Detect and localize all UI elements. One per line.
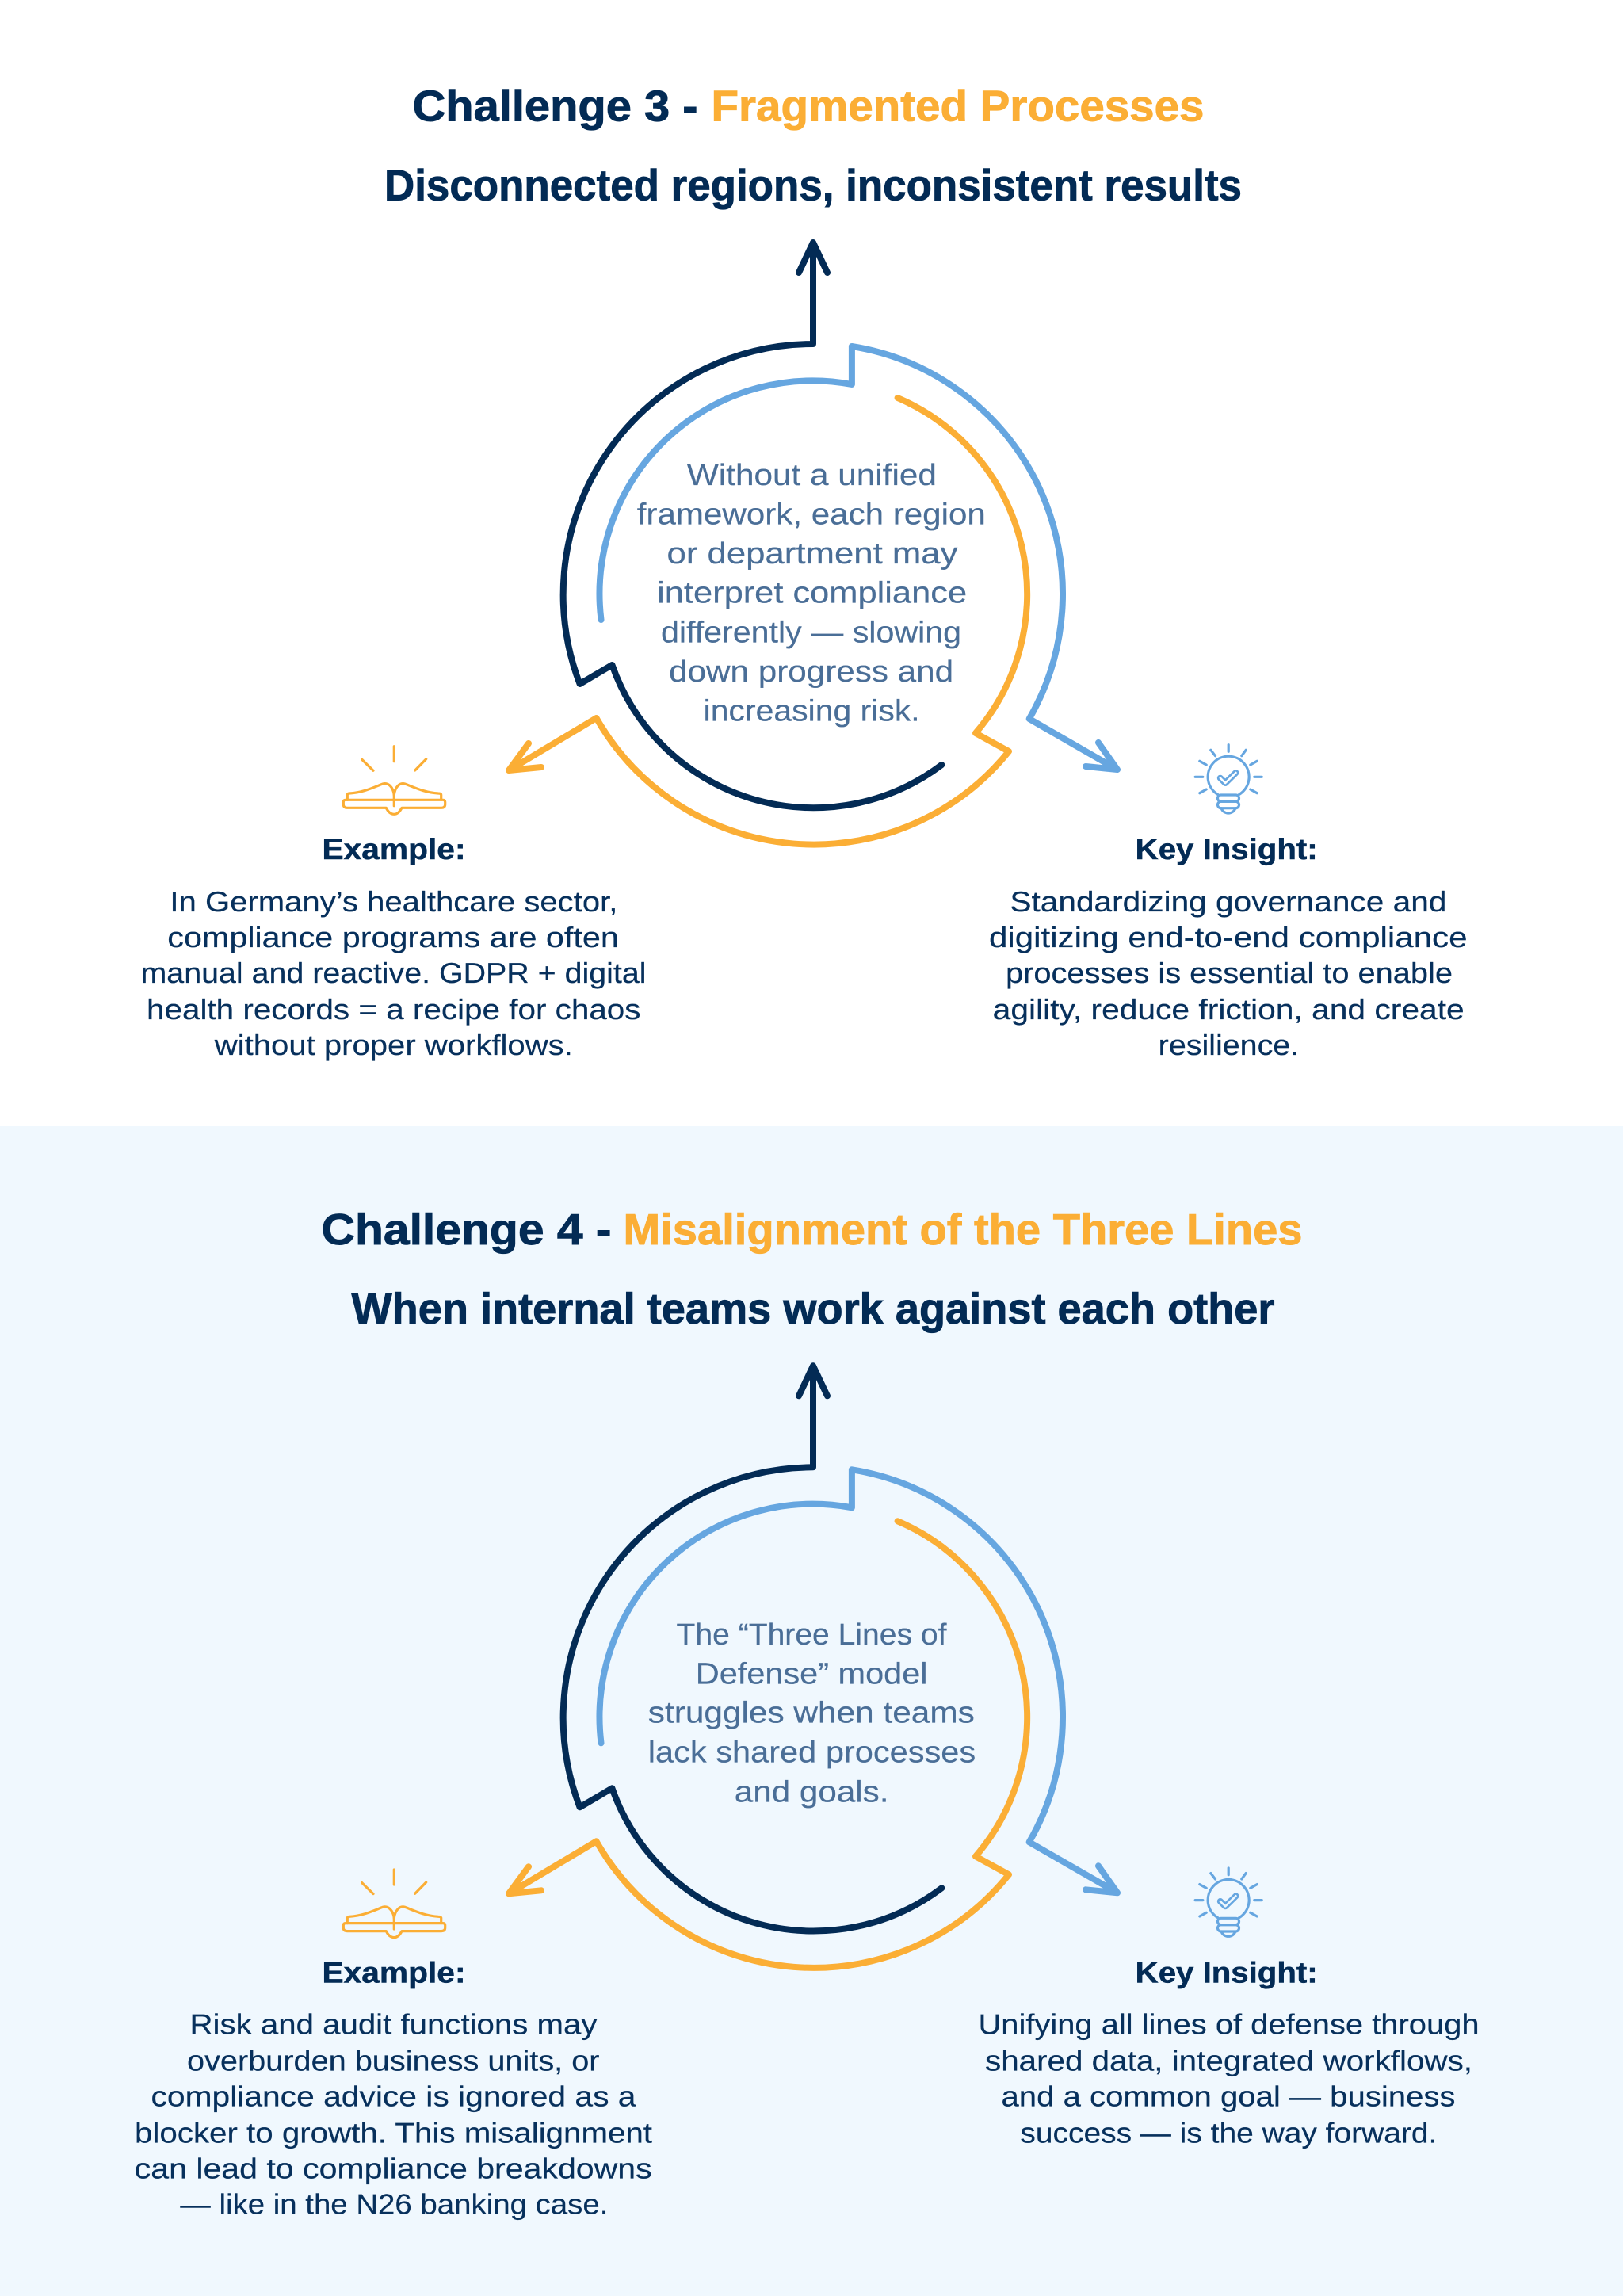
arrow: blue, pointing lower right	[600, 1469, 1117, 1893]
block: key insight: Unifying all lines of defense through	[978, 2008, 1479, 2041]
center text: challenge 3: down progress and	[669, 655, 953, 689]
center text: challenge 4: lack shared processes	[648, 1736, 976, 1769]
cycle diagram: three interlocking arrows	[509, 1366, 1117, 1968]
block: example: In Germany’s healthcare sector,	[170, 885, 617, 918]
block: example	[141, 833, 647, 1061]
center text: challenge 3: increasing risk.	[704, 695, 920, 728]
block: example: health records = a recipe for chaos	[147, 993, 640, 1026]
block: example: manual and reactive. GDPR + digital	[141, 957, 647, 989]
block: key insight: and a common goal — business	[1002, 2080, 1455, 2112]
block: example: overburden business units, or	[187, 2044, 600, 2076]
block: key insight: digitizing end-to-end compliance	[989, 921, 1468, 953]
subtitle: challenge 4: When internal teams work against each other	[352, 1284, 1274, 1333]
block: key insight	[989, 833, 1468, 1061]
block: example: compliance advice is ignored as a	[151, 2080, 637, 2112]
icon: open book	[343, 747, 445, 814]
block: example: blocker to growth. This misalignment	[135, 2116, 652, 2149]
block: example: Risk and audit functions may	[190, 2008, 598, 2041]
title: challenge 3: Fragmented Processes	[712, 82, 1205, 131]
icon: light bulb with check	[1195, 745, 1262, 813]
block: example	[135, 1956, 652, 2221]
center text: challenge 4: struggles when teams	[648, 1697, 975, 1730]
center text: challenge 4	[648, 1618, 976, 1809]
block: key insight	[978, 1956, 1479, 2149]
arrow: navy, pointing up	[563, 243, 941, 808]
block: key insight: shared data, integrated workflows,	[985, 2044, 1472, 2076]
center text: challenge 3: differently — slowing	[661, 616, 961, 649]
panel: challenge 4	[0, 1126, 1623, 2296]
title: challenge 4: Misalignment of the Three Lines	[623, 1205, 1303, 1254]
block: key insight: Standardizing governance and	[1010, 885, 1446, 918]
icon: light bulb with check	[1195, 1868, 1262, 1936]
arrow: navy, pointing up	[563, 1366, 941, 1931]
title: challenge 3: Challenge 3 -	[412, 82, 697, 131]
block: key insight: Key Insight:	[1136, 1956, 1318, 1988]
arrow: orange, pointing lower left	[509, 398, 1027, 845]
center text: challenge 4: The “Three Lines of	[677, 1618, 947, 1652]
center text: challenge 3: or department may	[667, 537, 957, 571]
block: key insight: processes is essential to enable	[1006, 957, 1453, 989]
title: challenge 4: Challenge 4 -	[322, 1205, 612, 1254]
center text: challenge 3	[637, 459, 986, 728]
block: example: Example:	[322, 833, 466, 865]
center text: challenge 4: and goals.	[735, 1775, 889, 1809]
block: example: without proper workflows.	[214, 1029, 573, 1061]
arrow: blue, pointing lower right	[600, 346, 1117, 770]
cycle diagram: three interlocking arrows	[509, 243, 1117, 845]
block: key insight: resilience.	[1159, 1029, 1299, 1061]
panel: challenge 3	[0, 0, 1623, 1126]
center text: challenge 3: interpret compliance	[657, 577, 967, 610]
block: key insight: success — is the way forward.	[1020, 2116, 1437, 2149]
title: challenge 4	[322, 1205, 1303, 1254]
arrow: orange, pointing lower left	[509, 1521, 1027, 1968]
block: key insight: agility, reduce friction, and create	[993, 993, 1465, 1026]
block: example: Example:	[322, 1956, 466, 1988]
title: challenge 3	[412, 82, 1205, 131]
center text: challenge 3: framework, each region	[637, 498, 986, 531]
subtitle: challenge 3: Disconnected regions, inconsistent results	[384, 160, 1242, 209]
block: key insight: Key Insight:	[1136, 833, 1318, 865]
icon: open book	[343, 1870, 445, 1938]
block: example: compliance programs are often	[167, 921, 619, 953]
block: example: can lead to compliance breakdowns	[135, 2152, 652, 2184]
center text: challenge 3: Without a unified	[687, 459, 937, 492]
center text: challenge 4: Defense” model	[696, 1657, 927, 1690]
block: example: — like in the N26 banking case.	[180, 2188, 608, 2221]
